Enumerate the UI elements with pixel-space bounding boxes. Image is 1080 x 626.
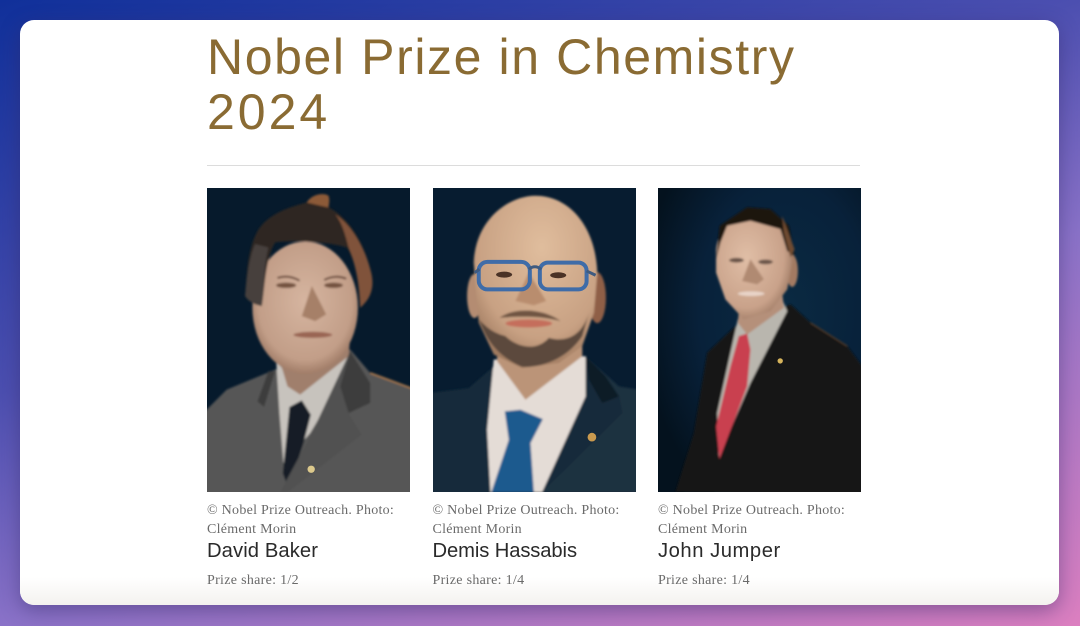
photo: John Jumper portrait xyxy=(658,188,861,492)
prize share: Prize share: 1/4 xyxy=(658,573,750,588)
photo: David Baker portrait xyxy=(207,188,410,492)
panel: laureate David Baker xyxy=(207,188,410,588)
caption: photo credit: Clément Morin xyxy=(658,522,747,537)
caption: photo credit xyxy=(207,503,394,537)
title: Nobel Prize in Chemistry 2024 xyxy=(207,29,796,140)
name: John Jumper xyxy=(658,540,781,562)
caption: photo credit xyxy=(658,503,845,537)
name: Demis Hassabis xyxy=(432,540,577,562)
caption: photo credit: Clément Morin xyxy=(432,522,522,537)
prize share: Prize share: 1/2 xyxy=(207,573,299,588)
caption: photo credit: © Nobel Prize Outreach. Photo: xyxy=(432,503,620,518)
panel: laureate John Jumper xyxy=(658,188,861,588)
name: David Baker xyxy=(207,540,318,562)
caption: photo credit xyxy=(432,503,620,537)
caption: photo credit: © Nobel Prize Outreach. Photo: xyxy=(207,503,394,518)
panel: laureate Demis Hassabis xyxy=(432,188,636,588)
caption: photo credit: © Nobel Prize Outreach. Photo: xyxy=(658,503,845,518)
prize share: Prize share: 1/4 xyxy=(432,573,524,588)
caption: photo credit: Clément Morin xyxy=(207,522,296,537)
photo: Demis Hassabis portrait xyxy=(433,188,636,492)
